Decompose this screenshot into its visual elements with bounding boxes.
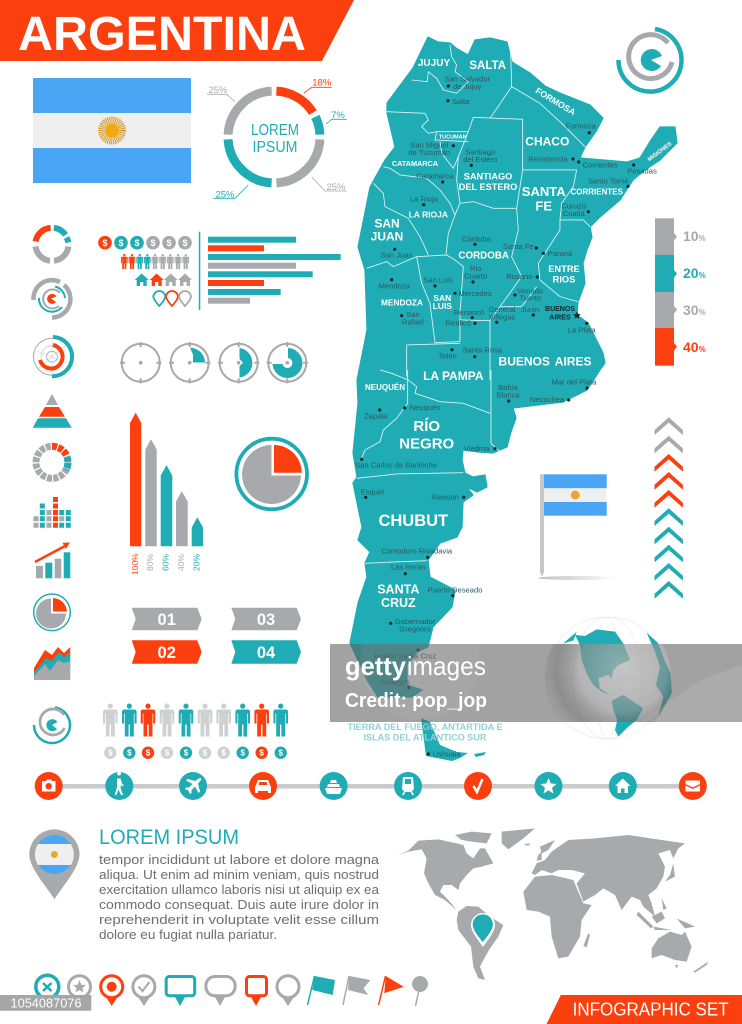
city names: Rafael [402,318,424,327]
province borders [350,45,590,563]
donut chart: lorem ipsum: 25% [326,182,346,193]
donut chart: lorem ipsum: IPSUM [252,139,298,156]
world map [398,828,708,980]
icon: segmented ring [36,446,68,478]
icon: house [615,778,630,793]
province names: JUJUY [418,58,450,69]
province names [365,58,673,610]
province names: MISIONES [647,141,673,163]
city names: Renancó [454,308,484,317]
people with dollar row: $ [259,748,264,758]
city names: Santa Rosa [462,346,503,355]
people with dollar row: $ [165,748,170,758]
city names: Santo Tomé [588,176,628,186]
people with dollar row: $ [278,748,283,758]
city names: Comodoro Rivadavia [381,547,453,556]
bottom pin and flag icons [36,975,428,1006]
numbered ribbon tags: 04 [257,644,276,662]
people with dollar row: $ [108,748,113,758]
city names: Mar del Plata [552,377,597,386]
city names: Santa Fe [503,242,534,251]
city names: Realicó [446,318,471,327]
city names: Catamarca [416,172,454,181]
icon rows: dollars, people, houses, pins: $ [118,238,124,248]
city names: del Estero [463,155,497,164]
Tierra del Fuego island [421,718,486,761]
province names: SAN [374,216,400,230]
province names: DEL ESTERO [459,182,517,192]
watermark band: Credit: pop_jop [345,690,487,712]
people with dollar row: $ [127,748,132,758]
city names: Las Heras [391,563,426,572]
icon: star [540,778,556,794]
icon: car [255,780,271,793]
city names: Gallegos [380,677,410,686]
icon rows: dollars, people, houses, pins: $ [102,238,108,248]
Tierra del Fuego label: TIERRA DEL FUEGO, ANTARTIDA E [348,722,502,732]
city names: AIRES [549,315,571,322]
icon rows: dollars, people, houses, pins: $ [134,238,140,248]
people with dollar row [103,704,288,759]
city names: Junin [521,305,539,314]
icon: small pie [34,594,70,631]
province names: MENDOZA [381,298,423,308]
province names: LA RIOJA [409,210,448,220]
arrow bar chart: 40% [176,554,186,571]
legend scale: 10% [683,228,706,244]
city names: San Luis [423,275,453,284]
body text [99,852,380,942]
Tierra del Fuego label: ISLAS DEL ATLANTICO SUR [364,732,487,742]
icon: envelope [686,780,700,792]
donut chart: lorem ipsum: 25% [215,190,235,200]
numbered ribbon tags: 02 [158,644,176,662]
province names: RÍO [413,418,440,435]
arrow bar chart [130,413,203,575]
title banner: ARGENTINA [18,8,306,61]
city names: Rawson [431,492,459,501]
city names: Cuarto [464,271,487,280]
map of Argentina [348,37,677,761]
city names: Corrientes [582,160,618,170]
legend scale [655,218,706,366]
top right spiral icon [618,29,681,92]
province names: ENTRE [548,264,580,274]
donut chart: lorem ipsum: 25% [208,85,228,96]
city names: Tuerto [519,294,541,303]
timeline with icons [35,772,707,800]
province names: CRUZ [381,596,416,610]
capital star [573,312,581,319]
province names: SANTA [522,184,566,199]
city names: Rosario [506,272,532,281]
city names: Puerto Deseado [428,586,482,595]
large pie chart [236,439,307,509]
infographic set banner: INFOGRAPHIC SET [573,1000,729,1020]
infographic set banner [547,995,742,1024]
heading: lorem ipsum: LOREM IPSUM [99,826,239,849]
city names: Córdoba [462,235,492,244]
donut chart: lorem ipsum: 18% [312,78,332,88]
city names: de Jujuy [453,82,482,91]
province names: CORRIENTES [570,188,624,197]
icon: small spiral [34,707,70,743]
province names: BUENOS AIRES [499,354,591,368]
province names: CORDOBA [458,250,509,262]
city names: Paraná [548,249,573,258]
body text: exercitation ullamco laboris nisi ut aliquip ex ea [99,882,380,897]
icon rows: dollars, people, houses, pins [98,236,192,306]
province names: CHACO [525,134,569,148]
globe [546,617,672,739]
city names: Santiago [465,147,495,156]
legend scale: 40% [683,339,706,355]
icon: pyramid [33,394,72,428]
watermark band [330,644,742,722]
legend scale: 20% [683,265,706,281]
icon: train [402,777,414,795]
flag of Argentina [33,78,191,183]
city names: Mendoza [379,281,411,290]
city names: Puerto Santa Cruz [374,651,437,660]
arrow bar chart: 60% [160,554,170,571]
city names: Zapala [364,411,388,420]
flag on pole [538,474,618,580]
city names: Mercedes [458,289,492,298]
city names: BUENOS [545,306,575,313]
city names: Salta [452,97,470,106]
icon: area chart [34,647,70,680]
city names: Gregores [399,625,431,634]
people with dollar row: $ [221,748,226,758]
image id tag: 1054087076 [10,996,82,1010]
province names: SANTA [377,583,419,597]
icon: plane [185,778,201,794]
city names: Bahía [498,383,519,392]
city names: de Tucumán [408,148,450,157]
icon rows: dollars, people, houses, pins: $ [150,238,156,248]
arrow bar chart: 20% [191,554,201,571]
body text: tempor incididunt ut labore et dolore magna [99,852,380,867]
arrow bar chart: 100% [130,553,140,575]
body text: reprehenderit in voluptate velit esse cillum [99,912,379,927]
city names: San Carlos de Bariloche [355,461,437,470]
province names: CHUBUT [378,512,448,530]
province names: RIOS [553,275,575,285]
icon: walker [115,772,124,795]
province names: LA PAMPA [423,369,484,383]
city names: Neuquén [410,403,440,412]
city names: Viedma [464,444,490,453]
province names: FORMOSA [534,86,578,118]
clock progress icons [120,342,308,383]
icon: equalizer chart [34,497,71,528]
city markers [360,84,635,756]
city names: San [406,310,420,319]
numbered ribbon tags: 03 [257,611,275,629]
city names: Venado [517,286,543,295]
chevron column [654,417,683,599]
numbered ribbon tags [132,608,301,664]
city names: Ushuaia [433,750,461,759]
icon: camera [42,780,56,792]
donut chart: lorem ipsum: LOREM [251,122,299,139]
city names: La Plata [568,325,596,334]
map marker [471,913,495,947]
arrow bar chart: 80% [145,554,155,571]
city names: General [488,305,516,314]
city names: San Miguel [410,141,449,150]
province names: LUIS [433,301,452,311]
legend scale: 30% [683,302,706,318]
province names: SAN [433,293,451,303]
city names: Rio [470,264,481,273]
people with dollar row: $ [184,748,189,758]
province names: JUAN [371,230,403,244]
people with dollar row: $ [146,748,151,758]
city names: Telén [439,351,457,360]
body text: aliqua. Ut enim ad minim veniam, quis nostrud [99,867,379,882]
icon: ship [325,780,342,794]
icon: rising bar chart with arrow [35,542,70,578]
city names: San Juan [381,250,413,260]
horizontal bar chart [199,232,341,310]
icon rows: dollars, people, houses, pins: $ [166,238,172,248]
donut chart: lorem ipsum: 7% [331,110,345,121]
location pin with flag [29,829,80,899]
icon: radar circle [34,337,72,376]
Tierra del Fuego label [348,722,502,742]
province names: FE [535,198,552,214]
city names: Cuatiá [563,209,585,218]
icon rows: dollars, people, houses, pins: $ [182,238,188,248]
watermark band: getty [345,651,407,681]
city names: La Rioja [410,195,439,204]
city names: Resistencia [528,154,568,164]
icon: spiral with rings [33,280,70,318]
province names: NEUQUÉN [365,383,405,392]
city names: Posadas [627,166,657,176]
province names: CATAMARCA [392,159,439,168]
city names [355,74,657,759]
city names: Blanca [496,391,520,400]
body text: dolore eu fugiat nulla pariatur. [99,927,277,942]
province names: NEGRO [399,436,455,452]
donut chart: lorem ipsum [207,78,347,200]
people with dollar row: $ [240,748,245,758]
city names: San Salvador [445,74,491,84]
people with dollar row: $ [203,748,208,758]
numbered ribbon tags: 01 [158,611,176,629]
watermark band: images [407,651,486,681]
body text: commodo consequat. Duis aute irure dolor in [99,897,379,912]
city names: Villegas [489,313,515,322]
province names: TUCUMAN [439,135,467,141]
province names: SANTIAGO [464,172,512,182]
icon: check [474,779,482,792]
city names: Necochea [530,395,565,404]
city names: Curuzú [561,201,586,210]
city names: Esquel [361,487,384,496]
icon: small donut [36,228,68,261]
city names: Gobernador [395,617,436,626]
city names: Formosa [566,122,596,131]
province names: SALTA [469,60,506,72]
